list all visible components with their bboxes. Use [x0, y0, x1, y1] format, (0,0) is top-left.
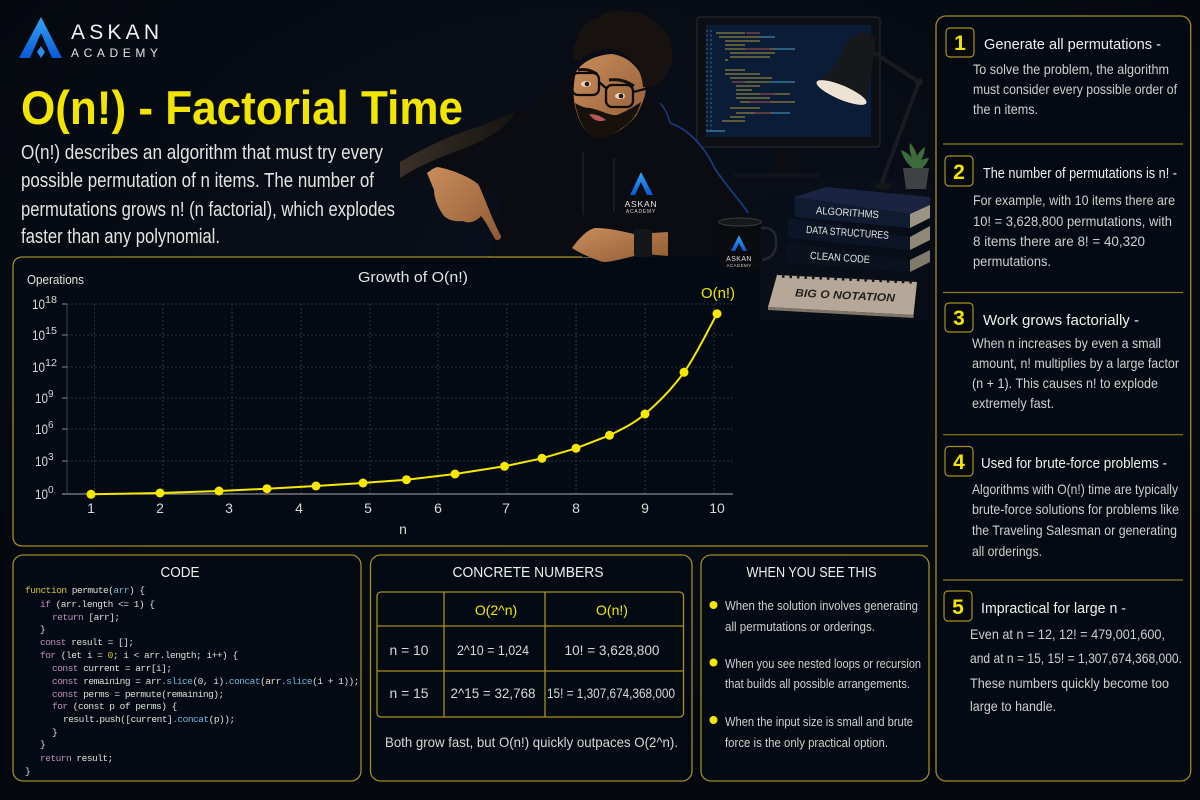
line chart: 15	[45, 326, 57, 337]
panel: growth chart	[13, 257, 928, 546]
comparison table: 2^10 = 1,024	[457, 642, 529, 658]
line chart: 10	[32, 359, 45, 375]
logo: Askan Academy: ACADEMY	[71, 46, 158, 60]
code heading: CODE	[160, 564, 200, 581]
point 3: 3	[953, 307, 965, 330]
lips	[589, 114, 606, 121]
code listing: return result;	[40, 753, 113, 764]
point 5: large to handle.	[970, 698, 1056, 714]
bullet 3: When the input size is small and brute	[725, 714, 913, 729]
bullet 1: When the solution involves generating	[725, 598, 918, 613]
point 1: 1	[954, 32, 966, 55]
book titles: DATA STRUCTURES	[806, 224, 889, 242]
hoodie strings	[583, 152, 614, 215]
point 1	[946, 28, 1177, 117]
book titles	[806, 205, 889, 266]
when heading: WHEN YOU SEE THIS	[746, 564, 876, 581]
eyes and brows	[578, 70, 634, 99]
line chart: 10	[35, 486, 48, 502]
comparison table: O(n!)	[596, 602, 628, 618]
point 3	[945, 303, 1179, 411]
line chart: 12	[45, 358, 57, 369]
line chart: 2	[156, 500, 164, 516]
illustration: coffee mug: ACADEMY	[726, 263, 752, 268]
code listing: }	[25, 766, 30, 777]
line chart: 10	[32, 327, 45, 343]
bullet 1: all permutations or orderings.	[725, 619, 875, 634]
line chart: 4	[295, 500, 303, 516]
y axis title: Operations	[27, 273, 84, 287]
point 2: For example, with 10 items there are	[973, 192, 1175, 208]
chart panel top edge in front of hoodie	[488, 256, 582, 258]
comparison note: Both grow fast, but O(n!) quickly outpaces O(2^n).	[385, 734, 678, 750]
hoodie logo: ASKAN	[625, 199, 657, 209]
point 2: 2	[953, 161, 965, 184]
comparison table: n = 10	[390, 642, 429, 658]
point 1: To solve the problem, the algorithm	[973, 61, 1169, 77]
line chart: 10	[709, 500, 725, 516]
resting fist	[572, 228, 668, 262]
line chart: 10	[35, 390, 48, 406]
code listing: const perms = permute(remaining);	[52, 689, 224, 700]
line chart: 18	[45, 295, 57, 306]
pointing hand	[427, 167, 501, 240]
point 4: brute-force solutions for problems like	[972, 501, 1179, 517]
line chart: 9	[48, 389, 54, 400]
hoodie logo: ACADEMY	[626, 209, 656, 215]
wristwatch	[634, 229, 652, 257]
line chart: 10	[32, 296, 45, 312]
point 2: 10! = 3,628,800 permutations, with	[973, 213, 1172, 229]
point 4: all orderings.	[972, 543, 1042, 559]
panel: code	[13, 555, 361, 781]
illustration: stack of books	[787, 187, 930, 272]
code listing: }	[40, 624, 45, 635]
hoodie	[400, 76, 748, 257]
bullet 2	[710, 656, 921, 691]
line chart: 8	[572, 500, 580, 516]
point 5: Even at n = 12, 12! = 479,001,600,	[970, 626, 1165, 642]
point 2: 8 items there are 8! = 40,320	[973, 233, 1145, 249]
bullet 2: that builds all possible arrangements.	[725, 676, 910, 691]
code listing: for (let i = 0; i < arr.length; i++) {	[40, 650, 238, 661]
line chart: 3	[225, 500, 233, 516]
illustration: desk lamp	[814, 32, 923, 190]
code listing: }	[40, 739, 45, 750]
code listing: if (arr.length <= 1) {	[40, 599, 154, 610]
illustration: coffee mug	[718, 218, 776, 271]
panel: key points	[936, 16, 1191, 781]
code listing: for (const p of perms) {	[52, 701, 177, 712]
intro text: permutations grows n! (n factorial), which explodes	[21, 199, 395, 221]
point 5: Impractical for large n -	[981, 600, 1126, 617]
bullet 2: When you see nested loops or recursion	[725, 656, 921, 671]
line chart	[32, 285, 735, 537]
point 4: the Traveling Salesman or generating	[972, 522, 1177, 538]
logo: Askan Academy: ASKAN	[71, 21, 159, 44]
book titles: ALGORITHMS	[816, 205, 879, 221]
beard	[575, 102, 641, 138]
intro text: O(n!) describes an algorithm that must try every	[21, 142, 383, 164]
point 3: extremely fast.	[972, 395, 1054, 411]
comparison table	[377, 592, 684, 717]
code listing: }	[52, 727, 57, 738]
comparison table: 10! = 3,628,800	[564, 642, 660, 658]
code listing: const result = [];	[40, 637, 134, 648]
line chart: n	[399, 521, 407, 537]
bullet 3: force is the only practical option.	[725, 735, 888, 750]
illustration: person pointing at the chart	[400, 11, 748, 262]
code listing: const current = arr[i];	[52, 663, 172, 674]
line chart: 10	[35, 453, 48, 469]
point 1: the n items.	[973, 101, 1038, 117]
code listing	[25, 585, 359, 777]
illustration: monitor with code	[697, 17, 930, 196]
logo: Askan Academy	[19, 17, 159, 60]
chart heading: Growth of O(n!)	[358, 269, 468, 286]
illustration: Big O notebook: BIG O NOTATION	[795, 287, 896, 305]
line chart: 9	[641, 500, 649, 516]
point 1: must consider every possible order of	[973, 81, 1177, 97]
line chart: O(n!)	[701, 285, 735, 302]
code listing: result.push([current].concat(p));	[63, 714, 235, 725]
point 2	[945, 156, 1177, 269]
intro text: possible permutation of n items. The number of	[21, 170, 374, 192]
code listing: return [arr];	[52, 612, 120, 623]
intro text	[21, 142, 395, 248]
face	[574, 54, 646, 138]
comparison table: n = 15	[390, 685, 429, 701]
point 4: Used for brute-force problems -	[981, 455, 1167, 472]
point 5: 5	[952, 596, 964, 619]
panel: concrete numbers	[370, 555, 692, 781]
point 5: These numbers quickly become too	[970, 675, 1169, 691]
point 4	[945, 446, 1179, 559]
point 3: amount, n! multiplies by a large factor	[972, 355, 1179, 371]
illustration: Big O notebook	[768, 275, 917, 318]
code listing: function permute(arr) {	[25, 585, 145, 596]
intro text: faster than any polynomial.	[21, 226, 220, 248]
comparison table: O(2^n)	[475, 602, 517, 618]
title: O(n!) - Factorial Time	[21, 81, 463, 134]
numbers heading: CONCRETE NUMBERS	[452, 564, 604, 581]
panel: when you see this	[701, 555, 929, 781]
hair	[573, 11, 673, 88]
line chart: 3	[48, 452, 54, 463]
point 4: 4	[953, 451, 965, 474]
point 3: When n increases by even a small	[972, 335, 1161, 351]
line chart: 1	[87, 500, 95, 516]
line chart: 6	[48, 420, 54, 431]
point 2: permutations.	[973, 253, 1051, 269]
line chart: 6	[434, 500, 442, 516]
comparison table: 15! = 1,307,674,368,000	[547, 685, 675, 701]
code listing: const remaining = arr.slice(0, i).concat(arr.slice(i + 1));	[52, 676, 359, 687]
bullet 3	[710, 714, 913, 750]
line chart: 5	[364, 500, 372, 516]
point 5	[944, 591, 1182, 714]
illustration: potted plant	[901, 143, 929, 189]
glasses	[572, 73, 653, 107]
sleeve highlight	[400, 112, 515, 178]
illustration: coffee mug: ASKAN	[726, 256, 752, 263]
book titles: CLEAN CODE	[810, 250, 870, 266]
line chart: 7	[502, 500, 510, 516]
point 3: (n + 1). This causes n! to explode	[972, 375, 1158, 391]
line chart: 0	[48, 485, 54, 496]
point 1: Generate all permutations -	[984, 36, 1161, 53]
comparison table: 2^15 = 32,768	[450, 685, 536, 701]
hoodie logo	[625, 172, 657, 215]
line chart: 10	[35, 421, 48, 437]
bullet 1	[710, 598, 918, 634]
point 3: Work grows factorially -	[983, 312, 1139, 329]
